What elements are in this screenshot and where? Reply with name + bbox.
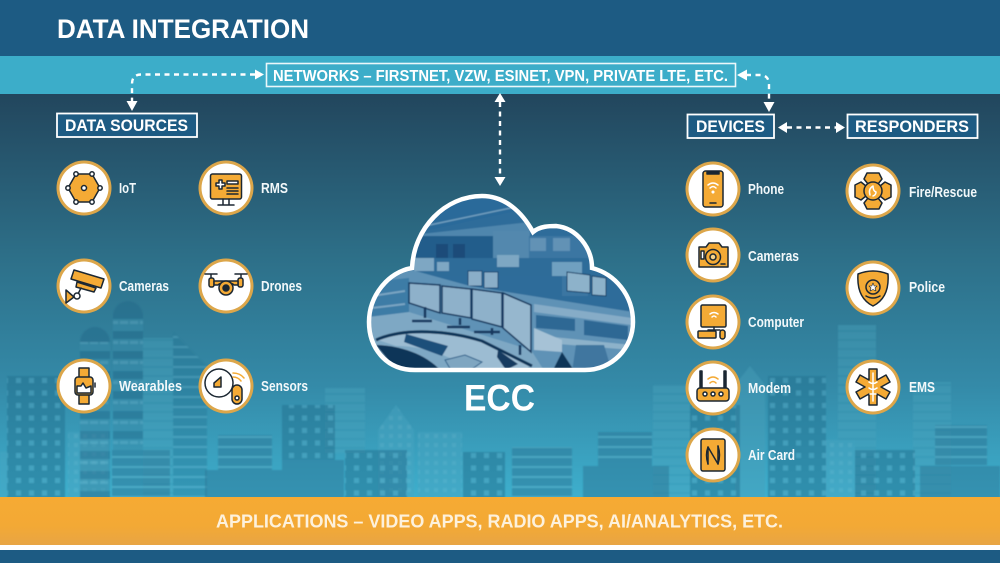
- responder: EMS: [846, 360, 935, 414]
- device: phone: [686, 162, 784, 216]
- ECC label: ECC: [464, 376, 535, 418]
- data source: wearables: [56, 358, 182, 414]
- device: phone: Phone: [748, 182, 784, 198]
- responder: police: Police: [909, 280, 945, 296]
- data source: wearables: Wearables: [119, 379, 182, 395]
- device: cameras: [686, 228, 799, 282]
- data source: IoT: [56, 160, 136, 216]
- heading: responders: RESPONDERS: [855, 118, 969, 136]
- heading: devices: DEVICES: [696, 118, 765, 136]
- footer stripe: [0, 545, 1000, 563]
- device: computer: Computer: [748, 315, 804, 331]
- arrow: networks to data sources: [126, 70, 264, 111]
- data source: drones: [198, 258, 302, 314]
- skyline illustration: [0, 301, 1000, 498]
- networks band: [0, 56, 1000, 94]
- data source: sensors: Sensors: [261, 379, 308, 395]
- device: air card: Air Card: [748, 448, 795, 464]
- data source: cameras: Cameras: [119, 279, 169, 295]
- arrow: devices to responders: [778, 122, 845, 133]
- title: DATA INTEGRATION: [57, 14, 309, 44]
- main background: [0, 94, 1000, 498]
- arrow: networks to devices: [737, 70, 774, 112]
- applications bar: APPLICATIONS – VIDEO APPS, RADIO APPS, AI/ANALYTICS, ETC.: [216, 510, 783, 532]
- device: air card: [686, 428, 795, 482]
- data source: cameras: [56, 258, 169, 314]
- responder: EMS: EMS: [909, 380, 935, 396]
- header bar: [0, 0, 1000, 56]
- data source: IoT: IoT: [119, 181, 136, 197]
- heading: data sources: DATA SOURCES: [65, 117, 188, 135]
- networks label: NETWORKS – FIRSTNET, VZW, ESINET, VPN, PRIVATE LTE, ETC.: [273, 68, 728, 85]
- applications bar: [0, 497, 1000, 545]
- device: modem: [686, 360, 791, 416]
- device: computer: [686, 294, 804, 350]
- data source: sensors: [198, 358, 308, 414]
- data source: drones: Drones: [261, 279, 302, 295]
- responder: police: [846, 260, 945, 316]
- ECC cloud with control room photo: [360, 190, 640, 380]
- responder: fire/rescue: Fire/Rescue: [909, 185, 977, 201]
- responder: fire/rescue: [846, 164, 977, 218]
- heading: devices: [688, 114, 774, 138]
- data source: RMS: [198, 160, 288, 216]
- arrow: networks to ECC: [494, 93, 506, 186]
- device: cameras: Cameras: [748, 249, 799, 265]
- data source: RMS: RMS: [261, 181, 288, 197]
- heading: responders: [848, 114, 978, 138]
- device: modem: Modem: [748, 381, 791, 397]
